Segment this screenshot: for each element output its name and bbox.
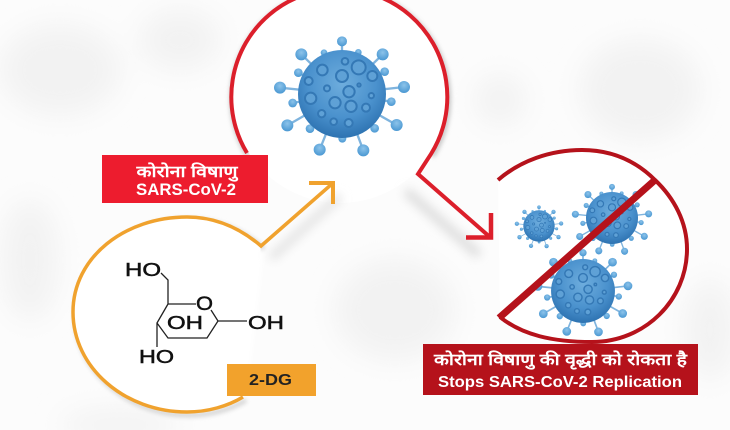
icon: lower virus [534,249,632,336]
2-DG chemical structure: O [196,294,213,315]
red callout outline with arrow [231,0,491,255]
label: coronavirus box: कोरोना विषाणु [135,162,239,182]
2-DG chemical structure: OH [167,313,203,333]
label: coronavirus box [102,155,268,203]
label: coronavirus box: SARS-CoV-2 [136,181,236,199]
panel: SARS-CoV-2 virus callout circle [231,0,491,255]
label: stops replication box: कोरोना विषाणु की वृद्धी को रोकता है [433,350,689,370]
label: stops replication box: Stops SARS-CoV-2 Replication [438,374,682,391]
label: stops replication box [423,344,698,395]
orange outline and arrow [73,183,333,412]
label: 2-DG box: 2-DG [249,372,292,389]
2-DG chemical structure [125,260,284,367]
2-DG chemical structure: HO [139,347,174,367]
icon: main coronavirus [274,36,410,156]
2-DG chemical structure: HO [125,260,161,280]
panel: 2-DG callout circle with arrow [73,183,340,415]
icon: upper virus [572,184,652,255]
2-DG chemical structure: OH [248,313,284,333]
prohibition slash [499,180,655,318]
panel: replication blocked circle [498,150,687,342]
label: 2-DG box [227,364,316,396]
icon: small virus [515,205,563,248]
